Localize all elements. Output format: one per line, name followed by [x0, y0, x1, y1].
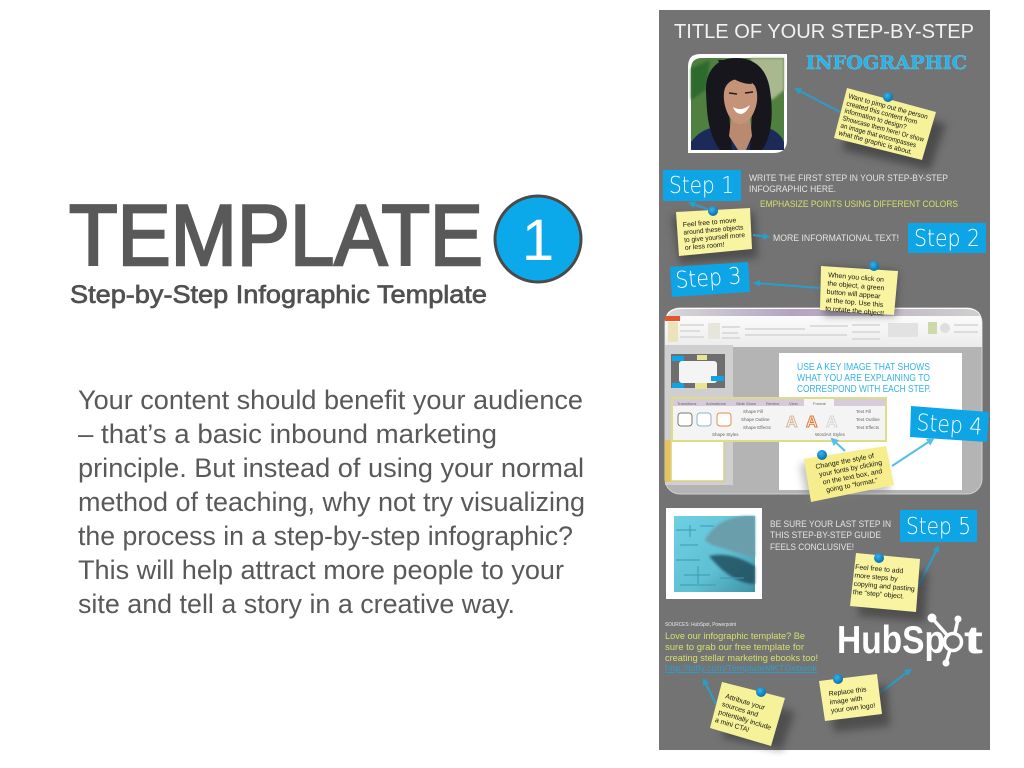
ribbon: format styles: WordArt Styles [815, 432, 846, 437]
screenshot heading: WHAT YOU ARE EXPLAINING TO [797, 373, 930, 384]
informational text: MORE INFORMATIONAL TEXT! [773, 233, 899, 243]
arrow: note to logo [880, 670, 910, 693]
infographic subtitle: INFOGRAPHIC [806, 52, 967, 74]
sticky note: move objects: or less room! [685, 242, 725, 252]
sticky note: more steps: Feel free to add [855, 564, 904, 575]
sticky note: photo tip: what the graphic is about. [837, 130, 913, 156]
sticky note: rotate object [820, 261, 898, 318]
step 1 text: EMPHASIZE POINTS USING DIFFERENT COLORS [760, 199, 958, 209]
sources line: SOURCES: HubSpot, Powerpoint [665, 622, 736, 628]
sticky note: format [800, 446, 894, 506]
ribbon: format styles [672, 398, 886, 441]
ribbon: format styles: Text Fill [856, 409, 871, 414]
sticky note: attribute sources [710, 682, 795, 750]
ribbon: format styles: Transitions [677, 401, 696, 406]
ribbon: format styles: Format [813, 401, 827, 406]
call to action text: sure to grab our free template for [665, 641, 804, 652]
arrow: note to text [753, 235, 768, 237]
step 5 text [770, 519, 891, 552]
ribbon: format styles: A [826, 414, 838, 431]
sticky note: attribute sources: potentially include [717, 709, 772, 732]
sticky note: photo tip: Showcase them here! Or show [842, 115, 925, 144]
panel: infographic template [659, 10, 990, 750]
sticky note: photo tip: Want to pimp out the person [847, 93, 929, 121]
infographic title: TITLE OF YOUR STEP-BY-STEP [674, 21, 974, 43]
arrows: format note [832, 439, 933, 466]
sticky note: rotate object: button will appear [826, 289, 881, 300]
step 5 label: Step 5 [906, 514, 971, 540]
body text: method of teaching, why not try visualizing [78, 487, 585, 517]
sticky note: more steps: the “step” object. [853, 589, 904, 601]
ribbon: format styles: A [786, 414, 798, 431]
step 1 text [749, 173, 958, 209]
puzzle image [666, 508, 762, 599]
sticky note: rotate object: the object, a green [827, 280, 885, 292]
sticky note: more steps: more steps by [854, 572, 898, 583]
sticky note: rotate object: to rotate the object! [825, 305, 884, 318]
call to action text [665, 630, 818, 673]
step 1 text: WRITE THE FIRST STEP IN YOUR STEP-BY-STEP [749, 173, 948, 183]
sticky note: replace logo: image with [829, 695, 863, 706]
step 5 text: THIS STEP-BY-STEP GUIDE [770, 530, 881, 540]
call to action text: http://bitly.com/TemplateMKTGebook [665, 663, 818, 673]
call to action text: creating stellar marketing ebooks too! [665, 652, 818, 663]
badge: number 1 [495, 196, 581, 282]
step 1 text: INFOGRAPHIC HERE. [749, 184, 836, 194]
body text: – that’s a basic inbound marketing [78, 419, 497, 449]
sticky note: photo tip: created this content from [846, 101, 918, 126]
ribbon: format styles: Text Effects [856, 425, 880, 430]
screenshot heading: USE A KEY IMAGE THAT SHOWS [797, 362, 930, 373]
sticky note: attribute sources: sources and [721, 701, 759, 719]
arrow: note to step 1 [690, 203, 710, 210]
sticky note: rotate object: When you click on [828, 272, 884, 284]
subtitle: Step-by-Step Infographic Template [70, 281, 487, 309]
ribbon: format styles: Animations [706, 401, 726, 406]
arrow: note to sources [704, 680, 716, 704]
screenshot heading: CORRESPOND WITH EACH STEP. [797, 384, 931, 395]
sticky note: attribute sources: a mini CTA! [714, 717, 750, 734]
sticky note: format: going to “format.” [826, 477, 879, 494]
sticky note: rotate object: at the top. Use this [826, 297, 884, 309]
ribbon: format styles: Shape Outline [741, 417, 770, 422]
sticky note: move objects [672, 206, 758, 264]
sticky note: more steps: copying and pasting [853, 581, 915, 593]
badge: number 1: 1 [522, 208, 554, 273]
ribbon: format styles: Shape Styles [712, 432, 739, 437]
sticky note: format: Change the style of [815, 453, 875, 471]
step 5 text: BE SURE YOUR LAST STEP IN [770, 519, 891, 529]
sticky note: move objects: around these objects [683, 224, 744, 237]
sticky note: move objects: to give yourself more [684, 232, 745, 244]
step 1 label: Step 1 [669, 173, 734, 199]
ribbon: format styles: Shape Effects [743, 425, 772, 430]
sticky note: replace logo: Replace this [828, 686, 867, 698]
body text: site and tell a story in a creative way. [78, 589, 515, 619]
ribbon: format styles: Text Outline [856, 417, 880, 422]
sticky note: more steps [850, 553, 928, 622]
body text: the process in a step-by-step infographic? [78, 521, 573, 551]
step 3 label: Step 3 [675, 263, 742, 294]
ribbon: format styles: View [789, 401, 798, 406]
logo: HubSpot [837, 614, 983, 666]
sticky note: move objects: Feel free to move [683, 217, 737, 229]
sticky note: format: on the text box, and [822, 468, 883, 486]
ribbon: format styles: Shape Fill [743, 409, 763, 414]
sticky note: replace logo [819, 674, 890, 732]
sticky note: photo tip [834, 88, 946, 170]
body text: Your content should benefit your audience [78, 385, 583, 415]
ribbon: format styles: A [806, 414, 818, 431]
screenshot heading [797, 362, 931, 395]
ribbon: format styles: Review [766, 401, 779, 406]
photo: portrait [688, 54, 787, 153]
sticky note: photo tip: an image that encompasses [840, 123, 917, 150]
screenshot: key image [665, 308, 982, 494]
arrow: note to step 5 [918, 547, 938, 587]
step 5 text: FEELS CONCLUSIVE! [770, 542, 854, 552]
step 2 label: Step 2 [914, 226, 980, 252]
logo: HubSpot: t [964, 619, 983, 662]
body text: This will help attract more people to your [78, 555, 564, 585]
sticky note: attribute sources: Attribute your [724, 693, 766, 712]
arrow: note to photo [796, 89, 840, 112]
step 4 label: Step 4 [916, 410, 983, 441]
call to action text: Love our infographic template? Be [665, 630, 805, 641]
sticky note: photo tip: information to design? [844, 108, 907, 131]
title: TEMPLATE [69, 188, 483, 284]
ribbon: format styles: Slide Show [736, 401, 756, 406]
logo: HubSpot: HubSp [837, 619, 945, 662]
body text [78, 385, 585, 619]
arrow: note to step 3 [755, 283, 820, 288]
sticky note: replace logo: your own logo! [830, 702, 876, 715]
body text: principle. But instead of using your normal [78, 453, 584, 483]
sticky note: format: your fonts by clicking [819, 460, 883, 479]
